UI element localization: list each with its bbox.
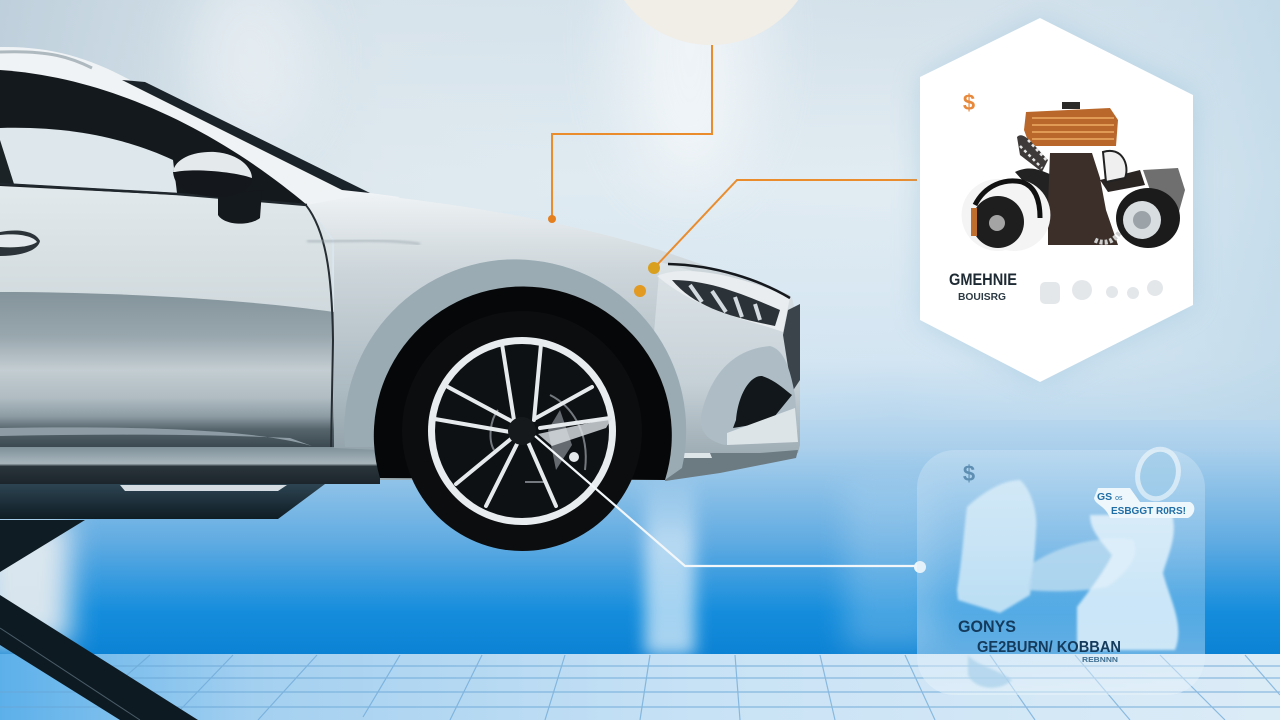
orange connector to engine panel	[634, 180, 917, 297]
icon: small dollar mark: $	[963, 90, 975, 115]
callout: label bubble: GS os	[1097, 491, 1123, 503]
panel: brake service glass	[917, 445, 1205, 695]
car: lower door shade	[0, 292, 334, 448]
car: wheel	[402, 311, 642, 551]
car: headlight	[657, 264, 790, 332]
car: window frame	[0, 70, 307, 205]
engine illustration	[962, 102, 1185, 251]
panel label: BOUISRG	[958, 292, 1006, 303]
light beam	[645, 480, 695, 655]
icon: small dollar mark: $	[963, 461, 975, 486]
callout: label bubble: ESBGGT R0RS!	[1111, 506, 1186, 517]
white connector to brake panel	[535, 436, 926, 573]
car: mirror	[173, 152, 262, 224]
car: window glass	[0, 128, 177, 193]
car: fog lamp housing	[701, 346, 798, 445]
icon: ring	[1132, 445, 1184, 503]
car: hood crease	[307, 241, 420, 244]
car	[0, 47, 800, 551]
car: wheel arch lip	[344, 259, 686, 480]
top circle callout	[604, 0, 818, 45]
car: roof and A pillar	[0, 47, 400, 220]
panel label: GONYS	[958, 617, 1016, 636]
car: door handle	[0, 230, 40, 256]
callout: label bubble	[1094, 488, 1194, 518]
panel label: GE2BURN/ KOBBAN	[977, 639, 1121, 656]
car: wheel arch	[374, 286, 672, 480]
faint parts icons	[1040, 280, 1163, 304]
car: front bumper	[650, 262, 800, 481]
orange connector to top circle	[548, 45, 712, 223]
car: door seam	[306, 205, 333, 450]
panel label	[949, 270, 1017, 303]
car: fender and hood	[307, 194, 790, 480]
scissor lift	[0, 484, 325, 720]
tiled floor	[0, 654, 1280, 720]
car: grille edge	[783, 304, 800, 392]
car: door panel	[0, 186, 334, 450]
panel label	[958, 617, 1121, 664]
panel: engine hexagon	[920, 18, 1193, 382]
panel label: REBNNN	[1082, 657, 1118, 664]
car: side skirt	[0, 447, 380, 484]
car: rocker highlight	[0, 427, 312, 446]
panel label: GMEHNIE	[949, 270, 1017, 289]
brake rotor illustration	[957, 480, 1178, 688]
